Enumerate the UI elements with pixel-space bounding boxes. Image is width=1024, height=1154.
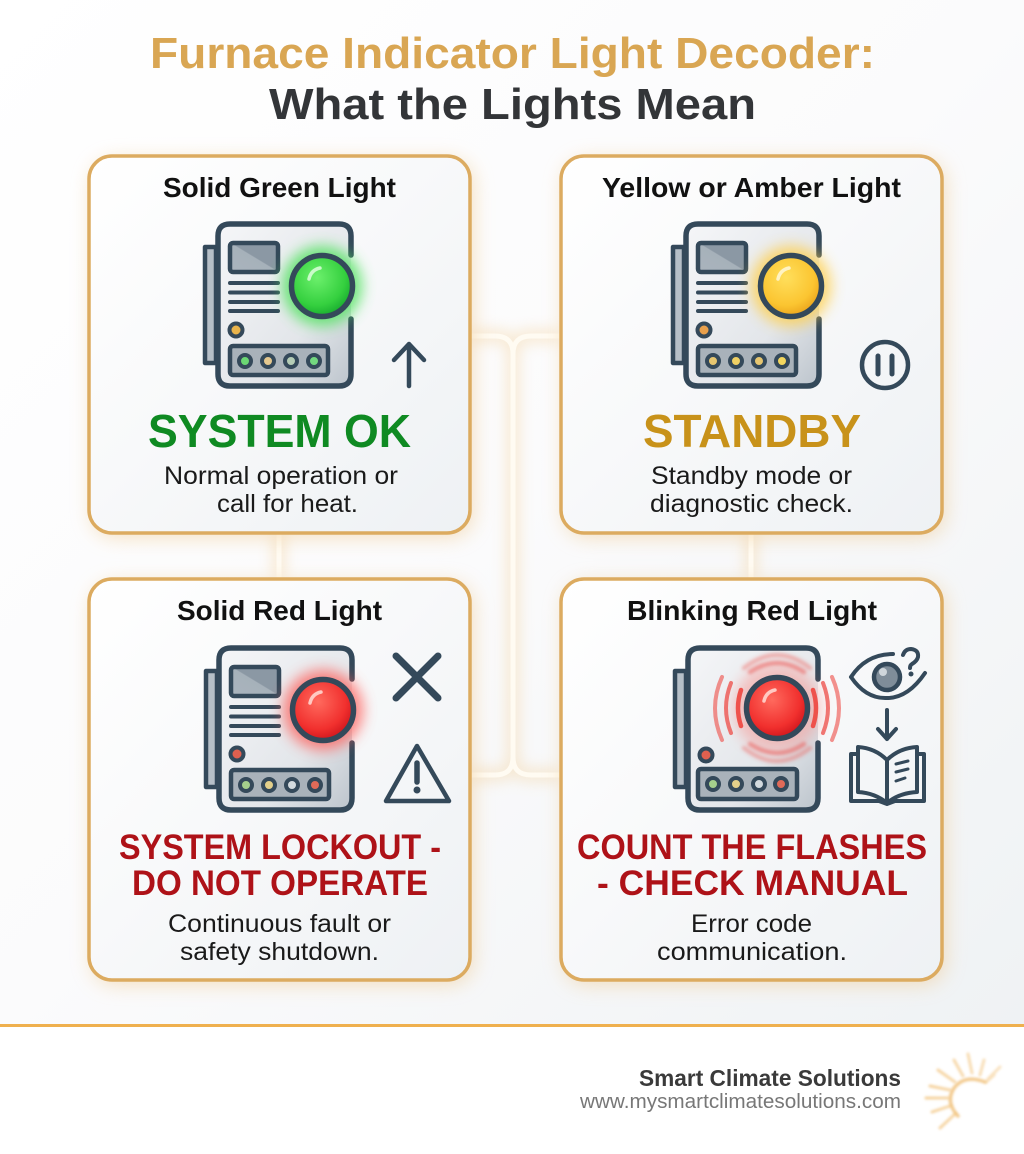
- description: error code: Error code: [691, 910, 812, 938]
- footer brand text: www.mysmartclimatesolutions.com: [579, 1091, 901, 1113]
- panel: solid green light: [89, 156, 473, 537]
- description: error code: communication.: [657, 938, 847, 966]
- heading: yellow or amber light: Yellow or Amber Light: [602, 172, 901, 203]
- status: standby: STANDBY: [643, 405, 861, 457]
- icon: warning triangle: [386, 746, 449, 801]
- connector lines: [279, 336, 751, 775]
- icon: down arrow: [878, 710, 896, 739]
- footer divider: [0, 1024, 1024, 1027]
- status: system lockout: SYSTEM LOCKOUT -: [119, 828, 441, 867]
- description: normal operation: [164, 462, 398, 518]
- description: standby mode: [650, 462, 853, 518]
- description: standby mode: Standby mode or: [651, 462, 852, 490]
- icon: furnace control board with green light: [205, 224, 362, 386]
- icon: furnace control board with red light: [206, 648, 363, 810]
- footer brand text: Smart Climate Solutions: [639, 1065, 901, 1091]
- status: count the flashes: [577, 828, 927, 903]
- description: standby mode: diagnostic check.: [650, 490, 853, 518]
- description: continuous fault: [168, 910, 391, 966]
- status: count the flashes: - CHECK MANUAL: [597, 864, 908, 903]
- icon: pause: [862, 342, 908, 388]
- icon: up arrow: [394, 344, 424, 386]
- heading: blinking red light: Blinking Red Light: [627, 595, 877, 626]
- status: system ok: SYSTEM OK: [148, 405, 411, 457]
- icon: sun logo: [926, 1054, 1000, 1128]
- heading: solid green light: Solid Green Light: [163, 172, 396, 203]
- icon: open manual: [851, 747, 924, 804]
- status: count the flashes: COUNT THE FLASHES: [577, 828, 927, 867]
- heading: solid red light: Solid Red Light: [177, 595, 382, 626]
- footer brand text: [579, 1065, 901, 1113]
- description: normal operation: call for heat.: [217, 490, 358, 518]
- footer band: [0, 1026, 1024, 1154]
- panel: blinking red light: [561, 579, 945, 984]
- title: What the Lights Mean: [269, 80, 756, 129]
- title: Furnace Indicator Light Decoder:: [150, 29, 875, 78]
- icon: furnace control board with blinking red light: [675, 648, 839, 810]
- status: system lockout: DO NOT OPERATE: [132, 864, 428, 903]
- panel: yellow or amber light: [561, 156, 945, 537]
- description: normal operation: Normal operation or: [164, 462, 398, 490]
- description: continuous fault: Continuous fault or: [168, 910, 391, 938]
- status: system lockout: [119, 828, 441, 903]
- description: error code: [657, 910, 847, 966]
- icon: x mark: [396, 656, 438, 698]
- title: [150, 29, 875, 129]
- panel: solid red light: [89, 579, 473, 984]
- icon: furnace control board with amber light: [673, 224, 831, 386]
- description: continuous fault: safety shutdown.: [180, 938, 379, 966]
- icon: eye with question mark: [851, 649, 925, 698]
